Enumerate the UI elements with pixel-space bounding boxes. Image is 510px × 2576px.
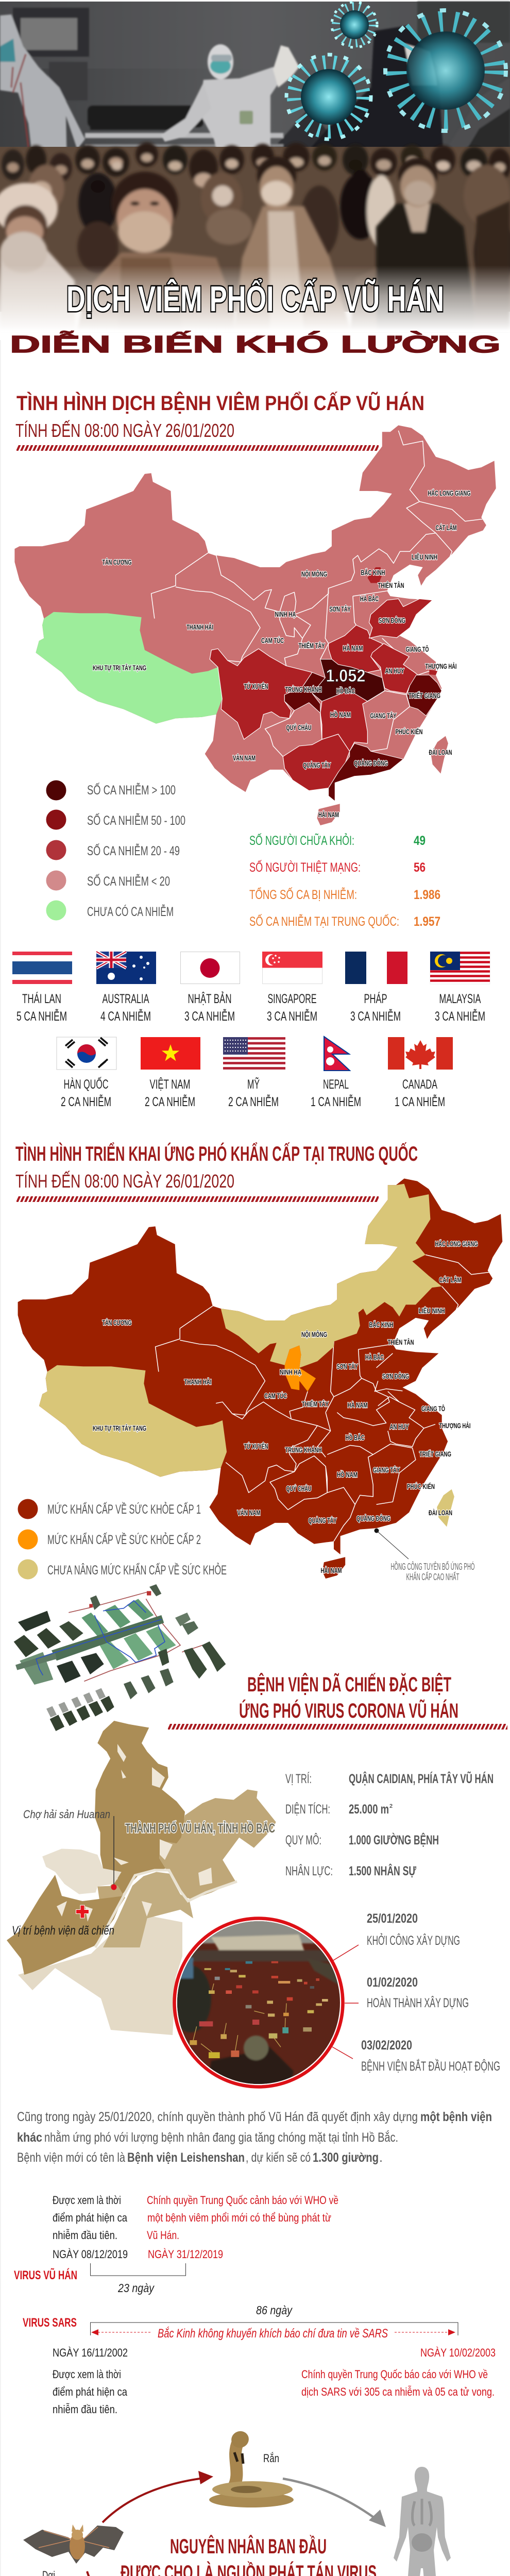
flag labels row 1: PHÁP (364, 991, 387, 1006)
hospital facts: 2 (389, 1803, 393, 1809)
flag labels row 1: 3 CA NHIỄM (435, 1008, 485, 1024)
flag labels row 2 (61, 1076, 445, 1109)
statistics: SỐ CA NHIỄM TẠI TRUNG QUỐC: (249, 913, 399, 929)
flag labels row 2: 2 CA NHIỄM (61, 1094, 111, 1109)
paragraph: khác (17, 2130, 42, 2145)
section heading: situation: TÌNH HÌNH DỊCH BỆNH VIÊM PHỔI CẤP VŨ HÁN (16, 391, 424, 415)
province labels: THIỂM TÂY (299, 641, 325, 650)
legend: emergency levels: CHƯA NÂNG MỨC KHẨN CẤP VỀ SỨC KHỎE (47, 1562, 227, 1578)
province labels (93, 1239, 478, 1574)
province labels: HÀ NAM (343, 644, 363, 652)
province labels: QUẢNG TÂY (308, 1516, 337, 1524)
flag labels row 2: 1 CA NHIỄM (311, 1094, 361, 1109)
flag labels row 1 (16, 991, 485, 1024)
statistics: SỐ NGƯỜI THIỆT MẠNG: (249, 859, 361, 875)
province labels: CÁT LÂM (436, 523, 456, 532)
province labels: THANH HẢI (184, 1378, 211, 1386)
province labels: LIÊU NINH (412, 552, 437, 561)
timeline: SARS virus: NGÀY 10/02/2003 (420, 2346, 496, 2359)
flag labels row 1: 3 CA NHIỄM (184, 1008, 235, 1024)
province labels: HẢI NAM (318, 810, 339, 819)
hospital facts: 1.000 GIƯỜNG BỆNH (349, 1832, 439, 1848)
timeline: Wuhan virus: điểm phát hiện ca (53, 2211, 128, 2224)
province labels: CÁT LÂM (439, 1275, 462, 1284)
province labels: HẮC LONG GIANG (428, 488, 471, 497)
legend: emergency levels: MỨC KHẨN CẤP VỀ SỨC KHỎE CẤP 2 (47, 1532, 201, 1547)
statistics: SỐ NGƯỜI CHỮA KHỎI: (249, 833, 354, 848)
timeline: SARS virus: 86 ngày (256, 2303, 293, 2317)
flag labels row 1: NHẬT BẢN (188, 991, 232, 1006)
timeline: Wuhan virus: một bệnh viêm phổi mới có thể bùng phát từ (147, 2211, 331, 2224)
hospital heading (239, 1672, 458, 1722)
timeline: SARS virus: VIRUS SARS (23, 2316, 77, 2330)
construction milestones: KHỞI CÔNG XÂY DỰNG (367, 1933, 460, 1948)
illustration: field hospital layout (14, 1584, 226, 1731)
province labels: HẢI NAM (320, 1566, 342, 1574)
flag labels row 1: MALAYSIA (439, 992, 481, 1006)
girl left (0, 246, 75, 330)
section subheading: date: TÍNH ĐẾN 08:00 NGÀY 26/01/2020 (15, 1171, 234, 1192)
paragraph: , dự kiến sẽ có (246, 2150, 311, 2165)
flag: South Korea (57, 1037, 116, 1070)
province labels: TRIẾT GIANG (409, 691, 440, 700)
province labels: PHÚC KIẾN (407, 1482, 435, 1490)
province labels: CAM TÚC (261, 636, 284, 645)
legend: emergency levels (18, 1499, 227, 1580)
paragraph: Cũng trong ngày 25/01/2020, chính quyền thành phố Vũ Hán đã quyết định xây dựng (17, 2110, 418, 2124)
province labels: QUẢNG TÂY (303, 760, 331, 769)
legend: case counts: CHƯA CÓ CA NHIỄM (87, 904, 174, 919)
flag labels row 2: 1 CA NHIỄM (395, 1094, 445, 1109)
timeline: Wuhan virus (14, 2194, 338, 2295)
paragraph: một bệnh viện (420, 2110, 492, 2124)
flag labels row 2: 2 CA NHIỄM (228, 1094, 279, 1109)
legend: case counts: SỐ CA NHIỄM < 20 (87, 873, 170, 889)
province labels: HÀ NAM (347, 1401, 368, 1409)
flag: USA (223, 1037, 285, 1070)
legend: case counts: SỐ CA NHIỄM 50 - 100 (87, 812, 185, 828)
province labels: GIANG TÔ (406, 645, 429, 653)
province labels: PHÚC KIẾN (396, 727, 422, 736)
icon: snake (209, 2429, 294, 2507)
flag: Canada (388, 1037, 453, 1070)
province labels: TRÙNG KHÁNH (285, 685, 321, 693)
province labels: SƠN TÂY (330, 604, 351, 613)
province labels: KHU TỰ TRỊ TÂY TẠNG (93, 663, 146, 672)
arrow: bat to soup (87, 2571, 197, 2576)
paragraph (17, 2110, 492, 2165)
Hubei case count: 1.052 (326, 666, 366, 686)
province labels: KHU TỰ TRỊ TÂY TẠNG (93, 1423, 146, 1432)
timeline: SARS virus: nhiễm đầu tiên. (53, 2403, 117, 2416)
timeline: Wuhan virus: Chính quyền Trung Quốc cảnh báo với WHO về (147, 2194, 338, 2207)
map: Wuhan (7, 1721, 276, 2035)
flag: Vietnam (141, 1037, 200, 1070)
construction milestones: 01/02/2020 (367, 1975, 418, 1990)
construction milestones (361, 1911, 500, 2074)
statistics: 1.957 (414, 914, 440, 929)
province labels: TỨ XUYÊN (244, 682, 268, 690)
construction milestones: 25/01/2020 (367, 1911, 418, 1926)
icon: human body (394, 2467, 451, 2576)
province labels: THƯỢNG HẢI (439, 1421, 471, 1430)
province labels: GIANG TÔ (421, 1404, 445, 1413)
heading: origin: NGUYÊN NHÂN BAN ĐẦU (170, 2534, 327, 2558)
hospital facts: 25.000 m (349, 1802, 389, 1817)
flag: Australia (96, 952, 156, 984)
statistics: 49 (414, 834, 426, 848)
province labels: HỒ NAM (330, 710, 351, 719)
flag labels row 1: 4 CA NHIỄM (100, 1008, 151, 1024)
timeline: Wuhan virus: Được xem là thời (53, 2194, 121, 2207)
flag labels row 1: 5 CA NHIỄM (16, 1008, 67, 1024)
timeline: Wuhan virus: Vũ Hán. (147, 2229, 179, 2242)
timeline: Wuhan virus: 23 ngày (117, 2281, 155, 2295)
flag: Japan (180, 952, 240, 984)
province labels: THIÊN TÂN (378, 581, 404, 589)
province labels (93, 488, 471, 819)
province labels: THANH HẢI (186, 623, 213, 631)
hospital facts (285, 1771, 494, 1878)
province labels: NỘI MÔNG (301, 569, 327, 578)
centre person (234, 206, 350, 330)
icon: hospital cross (76, 1905, 89, 1918)
timeline: SARS virus (23, 2303, 496, 2416)
construction connectors (332, 1945, 359, 2059)
timeline: Wuhan virus: NGÀY 08/12/2019 (53, 2248, 128, 2261)
province labels: VÂN NAM (233, 753, 256, 762)
legend: case counts: SỐ CA NHIỄM > 100 (87, 782, 176, 798)
statistics: 56 (414, 860, 426, 875)
callout: Hong Kong (374, 1528, 475, 1582)
province labels: TỨ XUYÊN (244, 1442, 268, 1450)
flag labels row 1: AUSTRALIA (102, 992, 149, 1006)
province labels: THIÊN TÂN (387, 1337, 414, 1346)
hospital facts: VỊ TRÍ: (285, 1771, 312, 1786)
province labels: NINH HẠ (280, 1368, 301, 1376)
paragraph: nhằm ứng phó với lượng bệnh nhân đang gia tăng chóng mặt tại tỉnh Hồ Bắc. (44, 2130, 398, 2145)
arrow: snake to human (283, 2479, 386, 2527)
province labels: SƠN ĐÔNG (382, 1371, 409, 1380)
province labels: NINH HẠ (275, 610, 296, 618)
flag: Malaysia (430, 952, 490, 984)
timeline: SARS virus: Được xem là thời (53, 2368, 121, 2381)
label: snake: Rắn (263, 2452, 279, 2465)
paragraph: Bệnh viện mới có tên là (17, 2150, 125, 2165)
province labels: SƠN TÂY (337, 1362, 358, 1370)
paragraph: Bệnh viện Leishenshan (127, 2150, 245, 2165)
crowd (0, 142, 510, 330)
province labels: ĐÀI LOAN (429, 748, 452, 756)
flag labels row 2: VIỆT NAM (149, 1077, 191, 1092)
province labels: HỒ BẮC (345, 1433, 365, 1442)
timeline: Wuhan virus: NGÀY 31/12/2019 (148, 2248, 223, 2261)
map: Wuhan: Chợ hải sản Huanan (23, 1808, 110, 1821)
province labels: QUẢNG ĐÔNG (354, 758, 388, 767)
heading: origin (121, 2534, 377, 2576)
flag labels row 2: HÀN QUỐC (64, 1076, 108, 1092)
province labels: AN HUY (385, 667, 404, 675)
province labels: BẮC KINH (361, 568, 385, 577)
hospital facts: 1.500 NHÂN SỰ (349, 1863, 416, 1878)
province labels: HỒ NAM (337, 1470, 358, 1479)
legend: emergency levels: MỨC KHẨN CẤP VỀ SỨC KHỎE CẤP 1 (47, 1501, 201, 1517)
flag: Singapore (262, 952, 322, 984)
province labels: GIANG TÂY (373, 1465, 400, 1474)
map: Wuhan: Vị trí bệnh viện dã chiến (12, 1924, 114, 1938)
hospital facts: NHÂN LỰC: (285, 1863, 333, 1878)
statistics: 1.986 (414, 888, 440, 902)
legend: case counts (46, 780, 185, 920)
man right (376, 204, 477, 330)
hospital facts: DIỆN TÍCH: (285, 1802, 330, 1817)
province labels: HỒ BẮC (336, 686, 355, 695)
province labels: THIỂM TÂY (302, 1399, 329, 1408)
province labels: HẮC LONG GIANG (435, 1239, 478, 1248)
flag: France (345, 952, 407, 984)
arrow: bat to snake (103, 2471, 213, 2522)
flag labels row 1: 3 CA NHIỄM (267, 1008, 317, 1024)
virus middle (286, 55, 371, 139)
province labels: LIÊU NINH (418, 1306, 445, 1315)
hero photo collage (0, 0, 510, 340)
flag labels row 1: SINGAPORE (268, 992, 316, 1006)
timeline: Wuhan virus: nhiễm đầu tiên. (53, 2229, 117, 2242)
section subheading: date: TÍNH ĐẾN 08:00 NGÀY 26/01/2020 (15, 420, 234, 441)
virus left small (332, 2, 377, 47)
flag: Nepal (324, 1037, 350, 1071)
province labels: AN HUY (389, 1422, 409, 1431)
province labels: BẮC KINH (369, 1320, 394, 1329)
province labels: HÀ BẮC (360, 594, 379, 603)
province labels: NỘI MÔNG (301, 1330, 327, 1338)
flag: Thailand (12, 952, 72, 984)
map: emergency levels (18, 1179, 502, 1582)
flag labels row 2: NEPAL (323, 1077, 349, 1092)
timeline: SARS virus: Bắc Kinh không khuyến khích báo chí đưa tin về SARS (158, 2327, 388, 2341)
flag labels row 1: THÁI LAN (22, 991, 61, 1006)
map: Wuhan: THÀNH PHỐ VŨ HÁN, TỈNH HỒ BẮC (125, 1820, 275, 1836)
flag labels row 2: 2 CA NHIỄM (145, 1094, 195, 1109)
province labels: TÂN CƯƠNG (102, 1318, 132, 1327)
province labels: TÂN CƯƠNG (102, 557, 132, 566)
hospital facts: QUY MÔ: (285, 1833, 321, 1848)
paragraph: . (379, 2150, 383, 2165)
province labels: HÀ BẮC (365, 1352, 384, 1361)
title line 2: DIỄN BIẾN KHÓ LƯỜNG (10, 331, 501, 358)
province labels: VÂN NAM (237, 1508, 261, 1517)
timeline: Wuhan virus: VIRUS VŨ HÁN (14, 2268, 77, 2282)
photo: construction site (170, 1917, 348, 2092)
legend: case counts: SỐ CA NHIỄM 20 - 49 (87, 843, 180, 858)
timeline: SARS virus: điểm phát hiện ca (53, 2385, 128, 2398)
province labels: QUÝ CHÂU (286, 1484, 311, 1493)
province labels: ĐÀI LOAN (429, 1509, 452, 1517)
timeline: SARS virus: NGÀY 16/11/2002 (53, 2346, 128, 2359)
map: infected cases by province (14, 426, 496, 825)
province labels: QUÝ CHÂU (286, 723, 311, 732)
flag labels row 1: 3 CA NHIỄM (350, 1008, 401, 1024)
province labels: THƯỢNG HẢI (426, 662, 456, 670)
flag labels row 2: MỸ (247, 1077, 260, 1092)
province labels: TRÙNG KHÁNH (285, 1445, 321, 1454)
statistics (249, 833, 440, 929)
province labels: CAM TÚC (264, 1391, 287, 1400)
construction milestones: 03/02/2020 (361, 2038, 412, 2053)
province labels: GIANG TÂY (370, 711, 397, 720)
statistics: TỔNG SỐ CA BỊ NHIỄM: (249, 887, 357, 902)
province labels: QUẢNG ĐÔNG (356, 1514, 390, 1522)
icon: bat (23, 2524, 124, 2564)
province labels: SƠN ĐÔNG (379, 616, 405, 624)
virus right large (385, 10, 506, 131)
flag labels row 2: CANADA (402, 1077, 437, 1092)
boy (77, 252, 234, 330)
paragraph: 1.300 giường (313, 2150, 379, 2165)
callout: Hong Kong: KHẨN CẤP CAO NHẤT (406, 1571, 460, 1582)
province labels: TRIẾT GIANG (419, 1450, 451, 1458)
